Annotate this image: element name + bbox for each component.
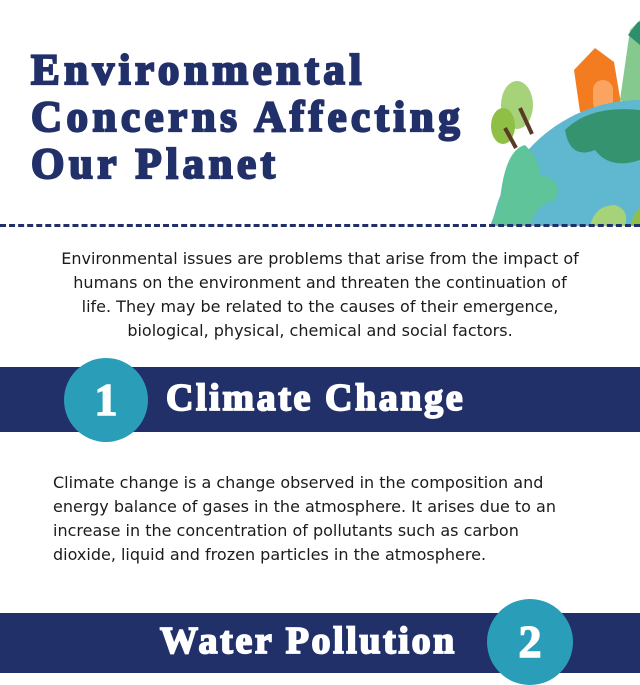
title: Concerns Affecting (31, 94, 464, 141)
section header: Water Pollution (0, 613, 640, 673)
title (30, 47, 464, 188)
number badge 2 (487, 599, 573, 685)
divider dashed (0, 224, 640, 227)
illustration: globe with trees and house (490, 20, 640, 226)
intro text: Environmental issues are problems that arise from the impact of (61, 249, 579, 268)
title: Our Planet (31, 141, 279, 188)
intro text: biological, physical, chemical and social factors. (127, 321, 513, 340)
intro text: life. They may be related to the causes of their emergence, (82, 297, 558, 316)
number badge 1: 1 (94, 374, 118, 425)
title: Environmental (31, 47, 366, 94)
section header: Climate Change (0, 367, 640, 432)
intro text: humans on the environment and threaten the continuation of (73, 273, 567, 292)
intro text (61, 249, 580, 340)
number badge 2: 2 (518, 616, 542, 667)
climate change text: Climate change is a change observed in the composition and energy balance of gases in the atmosphere. It arises due to an increase in the concentration of pollutants such as carbon dioxide, liquid and frozen particles in the atmosphere. (53, 473, 556, 564)
number badge 1 (64, 358, 148, 442)
heading: Climate Change (166, 377, 465, 419)
heading: Water Pollution (160, 620, 457, 662)
